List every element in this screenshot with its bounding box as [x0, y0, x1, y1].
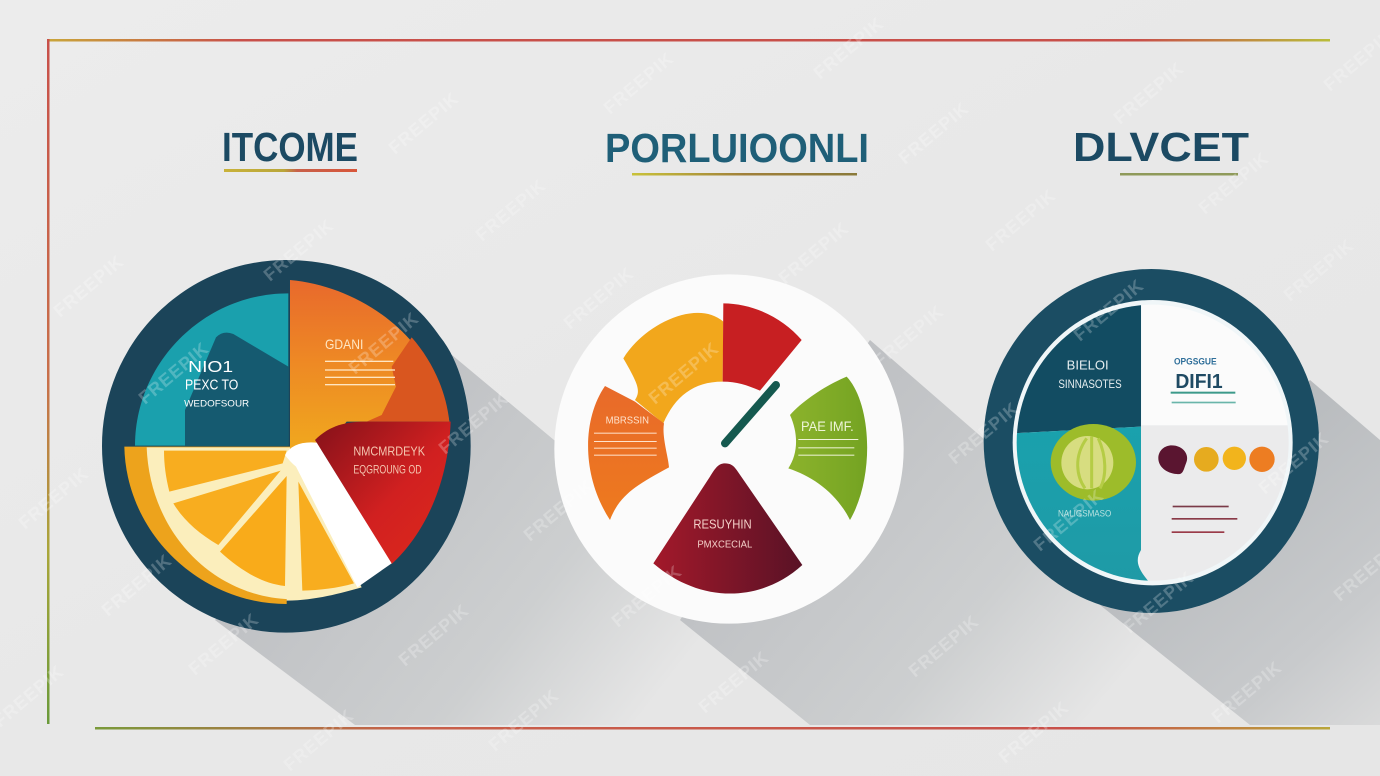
gauge segment: green: [788, 377, 867, 520]
dark ring: [984, 269, 1319, 613]
gauge segment: orange: [588, 386, 669, 520]
label: maroon segment: PMXCECIAL: [697, 539, 753, 550]
label: dark teal quadrant: BIELOI: [1067, 357, 1109, 372]
heading: income: ITCOME: [222, 124, 358, 170]
watermark layer: FREEPIK: [1255, 428, 1333, 498]
gauge segment: maroon: [653, 463, 802, 594]
label: teal slice: [184, 359, 249, 409]
watermark layer: FREEPIK: [385, 88, 463, 158]
label: maroon segment: [693, 517, 753, 550]
watermark layer: FREEPIK: [395, 600, 473, 670]
quadrant: teal: [1013, 427, 1152, 585]
watermark layer: FREEPIK: [775, 218, 853, 288]
label: orange slice: GDANI: [325, 336, 363, 352]
watermark layer: FREEPIK: [485, 685, 563, 755]
panel: income pie chart: [102, 260, 471, 633]
panel: portion gauge chart: [554, 274, 904, 624]
watermark layer: FREEPIK: [280, 705, 358, 775]
watermark layer: FREEPIK: [560, 263, 638, 333]
watermark layer: FREEPIK: [1208, 657, 1286, 727]
gauge segment: yellow: [623, 313, 723, 423]
watermark layer: FREEPIK: [982, 185, 1060, 255]
watermark layer: FREEPIK: [185, 609, 263, 679]
icon: plum: [1158, 445, 1187, 474]
label: maroon segment: RESUYHIN: [693, 517, 752, 531]
white inner ring: [1013, 300, 1293, 585]
slice: orange shaded edge: [367, 337, 449, 422]
lines: grey quadrant: [1172, 506, 1237, 533]
heading: portion: PORLUIOONLI: [605, 125, 869, 171]
watermark layer: FREEPIK: [695, 647, 773, 717]
watermark layer: FREEPIK: [1195, 148, 1273, 218]
frame: top rule: [47, 39, 1330, 42]
label: teal slice: WEDOFSOUR: [184, 399, 249, 409]
label: orange slice: [325, 336, 395, 385]
watermark layer: FREEPIK: [1070, 275, 1148, 345]
citrus rind: [147, 447, 290, 599]
label: green segment: PAE IMF.: [801, 418, 854, 434]
slice: orange: [290, 280, 449, 450]
label: teal slice: NIO1: [188, 359, 233, 376]
label: red slice: EQGROUNG OD: [353, 462, 422, 476]
citrus rind right: [287, 457, 362, 601]
heading: diet: DLVCET: [1073, 124, 1249, 170]
label: dark teal quadrant: SINNASOTES: [1058, 377, 1122, 391]
watermark layer: FREEPIK: [870, 301, 948, 371]
watermark layer: FREEPIK: [810, 13, 888, 83]
watermark layer: FREEPIK: [1030, 485, 1108, 555]
long shadow: portion chart: [680, 340, 1290, 725]
label: orange segment: MBRSSIN: [606, 415, 649, 426]
label: green segment: [798, 418, 858, 456]
label: dark teal quadrant: [1058, 357, 1122, 391]
label: white quadrant: [1171, 356, 1236, 403]
citrus segment 4: [298, 482, 354, 591]
label: white quadrant: DIFI1: [1175, 371, 1223, 393]
panel: diet plate chart: [984, 269, 1319, 613]
plate quadrants: [1013, 300, 1295, 585]
label: teal quadrant: NALIGSMASO: [1058, 509, 1111, 519]
slice: red: [315, 422, 451, 564]
slice: orange base: [124, 447, 290, 604]
label: red slice: NMCMRDEYK: [353, 444, 425, 459]
watermark layer: FREEPIK: [260, 215, 338, 285]
label: red slice: [353, 444, 425, 476]
watermark layer: FREEPIK: [905, 611, 983, 681]
long shadow: income chart: [215, 355, 830, 725]
icon: yellow fruit: [1194, 447, 1219, 472]
frame: bottom rule: [95, 727, 1330, 730]
slice: teal quadrant: [135, 293, 288, 446]
icon: golden fruit: [1223, 447, 1246, 470]
watermark layer: FREEPIK: [645, 338, 723, 408]
white disc: [554, 274, 904, 624]
watermark layer: FREEPIK: [15, 463, 93, 533]
icon: orange fruit: [1249, 447, 1275, 472]
watermark layer: FREEPIK: [1110, 58, 1188, 128]
quadrant: white: [1142, 300, 1295, 425]
label: white quadrant: OPGSGUE: [1174, 356, 1217, 366]
watermark layer: FREEPIK: [995, 697, 1073, 767]
quadrant: grey lower right: [1140, 425, 1293, 585]
watermark layer: FREEPIK: [135, 338, 213, 408]
long shadow: diet chart: [1100, 380, 1380, 725]
label: orange segment: [594, 415, 657, 456]
frame: left rule: [47, 39, 50, 724]
label: teal slice: PEXC TO: [185, 377, 238, 393]
gauge segment: red: [723, 303, 802, 391]
citrus segment 3: [220, 476, 287, 586]
quadrant: dark teal: [1013, 300, 1141, 433]
watermark layer: FREEPIK: [600, 48, 678, 118]
watermark layer: FREEPIK: [945, 398, 1023, 468]
watermark layer: FREEPIK: [472, 175, 550, 245]
watermark layer: FREEPIK: [1120, 567, 1198, 637]
outer dark ring: [102, 260, 471, 633]
watermark layer: FREEPIK: [608, 561, 686, 631]
white pith band: [285, 442, 392, 587]
citrus segment 1: [164, 451, 287, 492]
watermark layer: FREEPIK: [520, 475, 598, 545]
watermark layer: FREEPIK: [435, 388, 513, 458]
watermark layer: FREEPIK: [895, 98, 973, 168]
citrus segment 2: [173, 471, 281, 545]
watermark layer: FREEPIK: [98, 550, 176, 620]
slice: dark teal overlay: [185, 333, 288, 446]
watermark layer: FREEPIK: [1280, 235, 1358, 305]
icon: green melon: [1051, 424, 1136, 501]
needle: [725, 385, 776, 443]
watermark layer: FREEPIK: [345, 308, 423, 378]
watermark layer: FREEPIK: [50, 251, 128, 321]
